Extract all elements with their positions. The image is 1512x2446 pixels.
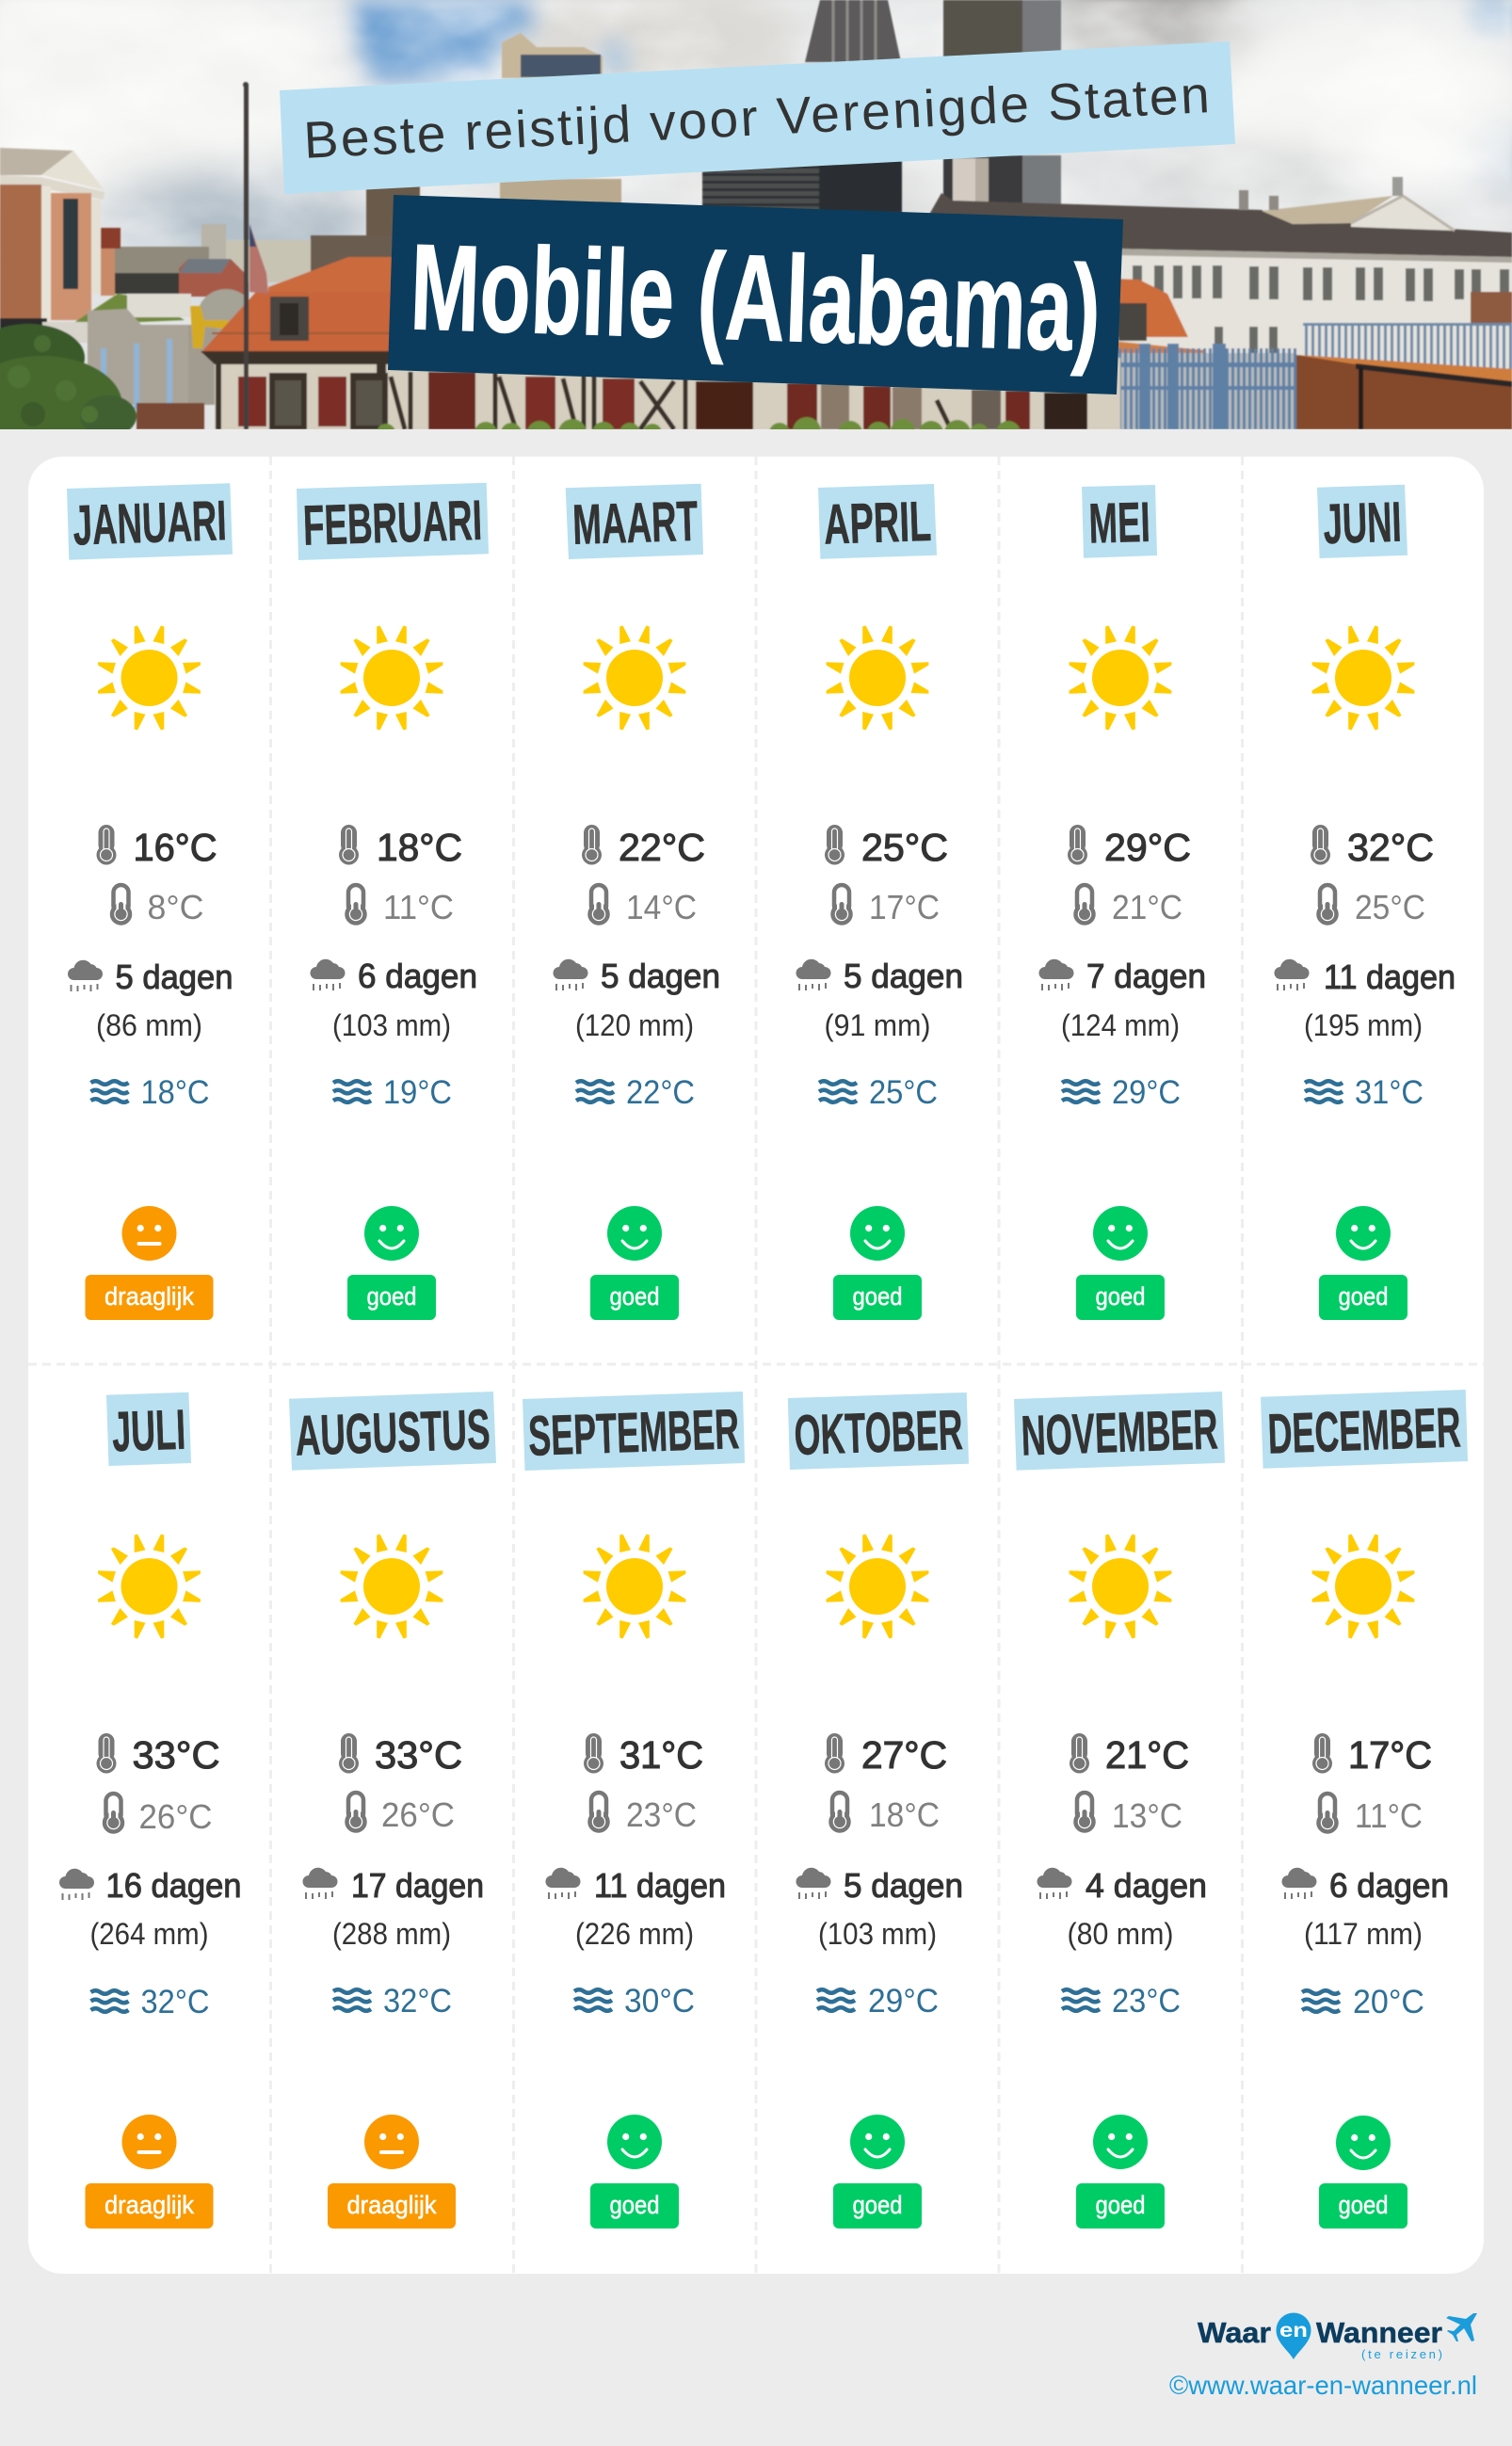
low temperature [1318,1794,1423,1835]
rain days: 4 dagen [1086,1866,1207,1905]
month label: november: NOVEMBER [1020,1397,1219,1468]
high temperature [1311,825,1434,869]
high temperature [339,825,462,869]
trees [0,318,47,330]
month label: juli: JULI [111,1398,186,1463]
icon: neutral face [364,2115,419,2169]
sea temperature: 23°C [1112,1983,1181,2020]
cell: juli [59,1392,241,2229]
high temperature: 21°C [1105,1733,1189,1777]
icon: happy face [607,2115,662,2169]
low temperature [589,1793,697,1834]
month label: april: APRIL [823,490,932,556]
sea temperature: 18°C [141,1074,209,1111]
icon: happy face [1336,1206,1391,1261]
logo: Waar en Wanneer: en [1279,2320,1308,2341]
month label: september: SEPTEMBER [527,1397,740,1468]
low temperature: 14°C [626,888,697,926]
month label: september [523,1392,745,1471]
icon: sun [98,625,201,731]
high temperature [96,1733,220,1777]
sea temperature [90,1074,209,1111]
high temperature: 33°C [132,1733,220,1777]
high temperature: 27°C [861,1733,947,1777]
icon: happy face [1093,2115,1148,2169]
icon: happy face [850,2115,905,2169]
low temperature: 26°C [139,1797,213,1836]
rainfall: (117 mm) [1304,1917,1423,1951]
rating badge [1319,1275,1407,1320]
sea temperature [576,1074,695,1111]
icon: sun [1070,625,1171,731]
title banner [388,195,1123,394]
rating badge [590,2183,679,2229]
rating badge [85,1275,213,1320]
high temperature [825,825,948,869]
cell: mei [1039,485,1206,1320]
rating badge [1076,2183,1165,2229]
sea temperature [574,1983,695,2020]
rain days: 6 dagen [358,957,477,995]
long white building right [930,193,1512,259]
distant towers [805,0,901,62]
logo: Waar en Wanneer: (te reizen) [1361,2347,1442,2361]
cell: januari [67,483,233,1320]
rating badge: draaglijk [105,2191,194,2219]
high temperature: 16°C [134,826,217,869]
rain days [68,957,233,996]
subtitle banner: Beste reistijd voor Verenigde Staten [302,65,1211,169]
sea temperature [1305,1074,1424,1111]
icon: sun [341,1535,442,1638]
low temperature [105,1794,213,1836]
cell: maart [554,484,720,1320]
low temperature: 23°C [626,1795,697,1834]
header photo: city skyline of Mobile [0,0,1512,454]
small orange roof right of banner [1116,279,1188,337]
high temperature: 32°C [1347,826,1434,869]
rating badge: goed [367,1282,416,1311]
rating badge [328,2183,456,2229]
mid-ground buildings left [310,234,367,272]
logo: Waar en Wanneer: Wanneer [1316,2316,1442,2349]
rainfall: (91 mm) [825,1008,930,1042]
high temperature: 31°C [619,1733,703,1777]
icon: happy face [850,1206,905,1261]
high temperature [584,1733,703,1777]
cell: december [1261,1390,1468,2229]
low temperature: 17°C [869,888,940,926]
cell: september [523,1392,745,2229]
rating badge: goed [853,1282,902,1311]
rating badge: goed [610,1282,659,1311]
low temperature: 13°C [1112,1796,1182,1835]
bushes [377,416,1021,429]
rainfall: (103 mm) [332,1008,451,1042]
panel: monthly climate table [28,457,1484,2274]
high temperature: 17°C [1348,1733,1432,1777]
icon: happy face [1336,2116,1391,2170]
sea temperature [1062,1983,1181,2020]
low temperature: 26°C [381,1795,455,1834]
rainfall: (80 mm) [1068,1917,1173,1951]
low temperature [1075,1793,1182,1835]
subtitle banner [280,41,1235,194]
icon: happy face [607,1206,662,1261]
rain days: 11 dagen [1324,957,1456,996]
high temperature: 22°C [619,826,705,869]
brick building left [0,148,73,175]
month label: maart: MAART [571,490,699,556]
month label: januari: JANUARI [72,489,228,557]
sea temperature: 20°C [1353,1984,1424,2020]
icon: happy face [364,1206,419,1261]
low temperature: 11°C [1355,1796,1423,1835]
sea temperature: 25°C [869,1074,938,1111]
rain days: 17 dagen [351,1866,484,1905]
low temperature [346,1793,455,1834]
low temperature [589,885,697,926]
rating badge [85,2183,213,2229]
rainfall: (288 mm) [332,1917,451,1951]
low temperature [1075,885,1182,926]
rating badge: goed [1096,1282,1145,1311]
high temperature: 29°C [1104,826,1191,869]
icon: sun [827,1535,928,1638]
rating badge: goed [1339,1282,1388,1311]
rating badge [347,1275,436,1320]
icon: neutral face [122,2115,177,2169]
rating badge: goed [1096,2191,1145,2219]
high temperature [825,1733,947,1777]
cell: oktober [788,1392,969,2229]
sea temperature [90,1984,209,2020]
rain days: 5 dagen [115,957,233,996]
title banner: Mobile (Alabama) [409,217,1102,378]
rainfall: (264 mm) [90,1917,209,1951]
sea temperature [1062,1074,1181,1111]
brick wall and fences [1471,292,1512,325]
rating badge [590,1275,679,1320]
month label: juni [1317,485,1407,558]
icon: sun [1312,625,1414,731]
flag pole and flag [244,85,249,429]
rain days: 16 dagen [105,1866,241,1905]
low temperature [830,1793,940,1834]
cell: juni [1275,485,1456,1320]
sea temperature [333,1983,452,2020]
rainfall: (86 mm) [96,1008,202,1042]
high temperature: 33°C [375,1733,462,1777]
month label: augustus [289,1392,496,1471]
rating badge: draaglijk [346,2191,437,2219]
icon: neutral face [122,1206,177,1261]
half-timbered house [215,358,1120,429]
month label: januari [67,483,233,560]
low temperature [112,885,203,926]
sea temperature: 32°C [383,1983,452,2020]
sea temperature: 29°C [1112,1074,1181,1111]
hill, wall and excavator [71,294,185,325]
sea temperature [333,1074,452,1111]
sea temperature [1302,1984,1424,2020]
month label: oktober [788,1392,969,1470]
month label: juli [106,1392,191,1466]
icon: sun [98,1535,201,1638]
website credit: ©www.waar-en-wanneer.nl [1169,2371,1477,2400]
high temperature [96,825,217,869]
icon: sun [1312,1535,1414,1638]
sea temperature [819,1074,938,1111]
sea temperature: 22°C [626,1074,695,1111]
icon: sun [1070,1535,1171,1638]
low temperature [346,885,454,926]
rating badge [1076,1275,1165,1320]
month label: februari [297,483,489,560]
rating badge [833,1275,922,1320]
sea temperature: 32°C [141,1984,209,2020]
rain days: 6 dagen [1329,1866,1449,1905]
rain days: 5 dagen [844,1866,963,1905]
low temperature: 18°C [869,1795,940,1834]
cell: augustus [289,1392,496,2229]
low temperature [1318,885,1425,926]
month label: mei: MEI [1088,491,1150,555]
rain days: 11 dagen [594,1866,726,1905]
month label: mei [1082,485,1157,558]
rating badge: goed [853,2191,902,2219]
month label: februari: FEBRUARI [302,489,483,557]
rainfall: (195 mm) [1304,1008,1423,1042]
low temperature: 21°C [1112,888,1182,926]
high temperature: 18°C [377,826,462,869]
rating badge: draaglijk [105,1282,194,1311]
rain days: 5 dagen [844,957,963,995]
month label: oktober: OKTOBER [793,1398,964,1467]
rating badge [833,2183,922,2229]
rating badge: goed [1339,2191,1388,2219]
low temperature [832,885,940,926]
sea temperature [817,1983,939,2020]
month label: juni: JUNI [1323,491,1403,555]
sea temperature: 29°C [868,1983,939,2020]
cell: april [796,484,963,1320]
low temperature: 8°C [147,888,203,926]
rain days: 7 dagen [1086,957,1206,995]
low temperature: 11°C [383,888,454,926]
rating badge [1319,2183,1407,2229]
month label: april [818,484,937,559]
icon: sun [584,625,685,731]
high temperature [1312,1733,1432,1777]
rainfall: (103 mm) [818,1917,937,1951]
logo: Waar en Wanneer: Waar [1198,2316,1271,2349]
rating badge: goed [610,2191,659,2219]
high temperature: 25°C [861,826,948,869]
rain days: 5 dagen [601,957,720,995]
logo: Waar en Wanneer [1198,2312,1477,2361]
sea temperature: 31°C [1355,1074,1424,1111]
month label: maart [566,484,703,559]
icon: sun [341,625,442,731]
rainfall: (226 mm) [575,1917,694,1951]
cell: februari [297,483,489,1320]
sea temperature: 30°C [624,1983,695,2020]
high temperature [1070,1733,1189,1777]
high temperature [582,825,705,869]
icon: sun [827,625,928,731]
rainfall: (124 mm) [1061,1008,1180,1042]
low temperature: 25°C [1355,888,1425,926]
high temperature [339,1733,462,1777]
rain days [303,1866,484,1905]
high temperature [1068,825,1191,869]
month label: november [1014,1392,1225,1471]
month label: augustus: AUGUSTUS [294,1397,491,1468]
cell: november [1014,1392,1225,2229]
icon: sun [584,1535,685,1638]
rainfall: (120 mm) [575,1008,694,1042]
icon: happy face [1093,1206,1148,1261]
sea temperature: 19°C [383,1074,452,1111]
